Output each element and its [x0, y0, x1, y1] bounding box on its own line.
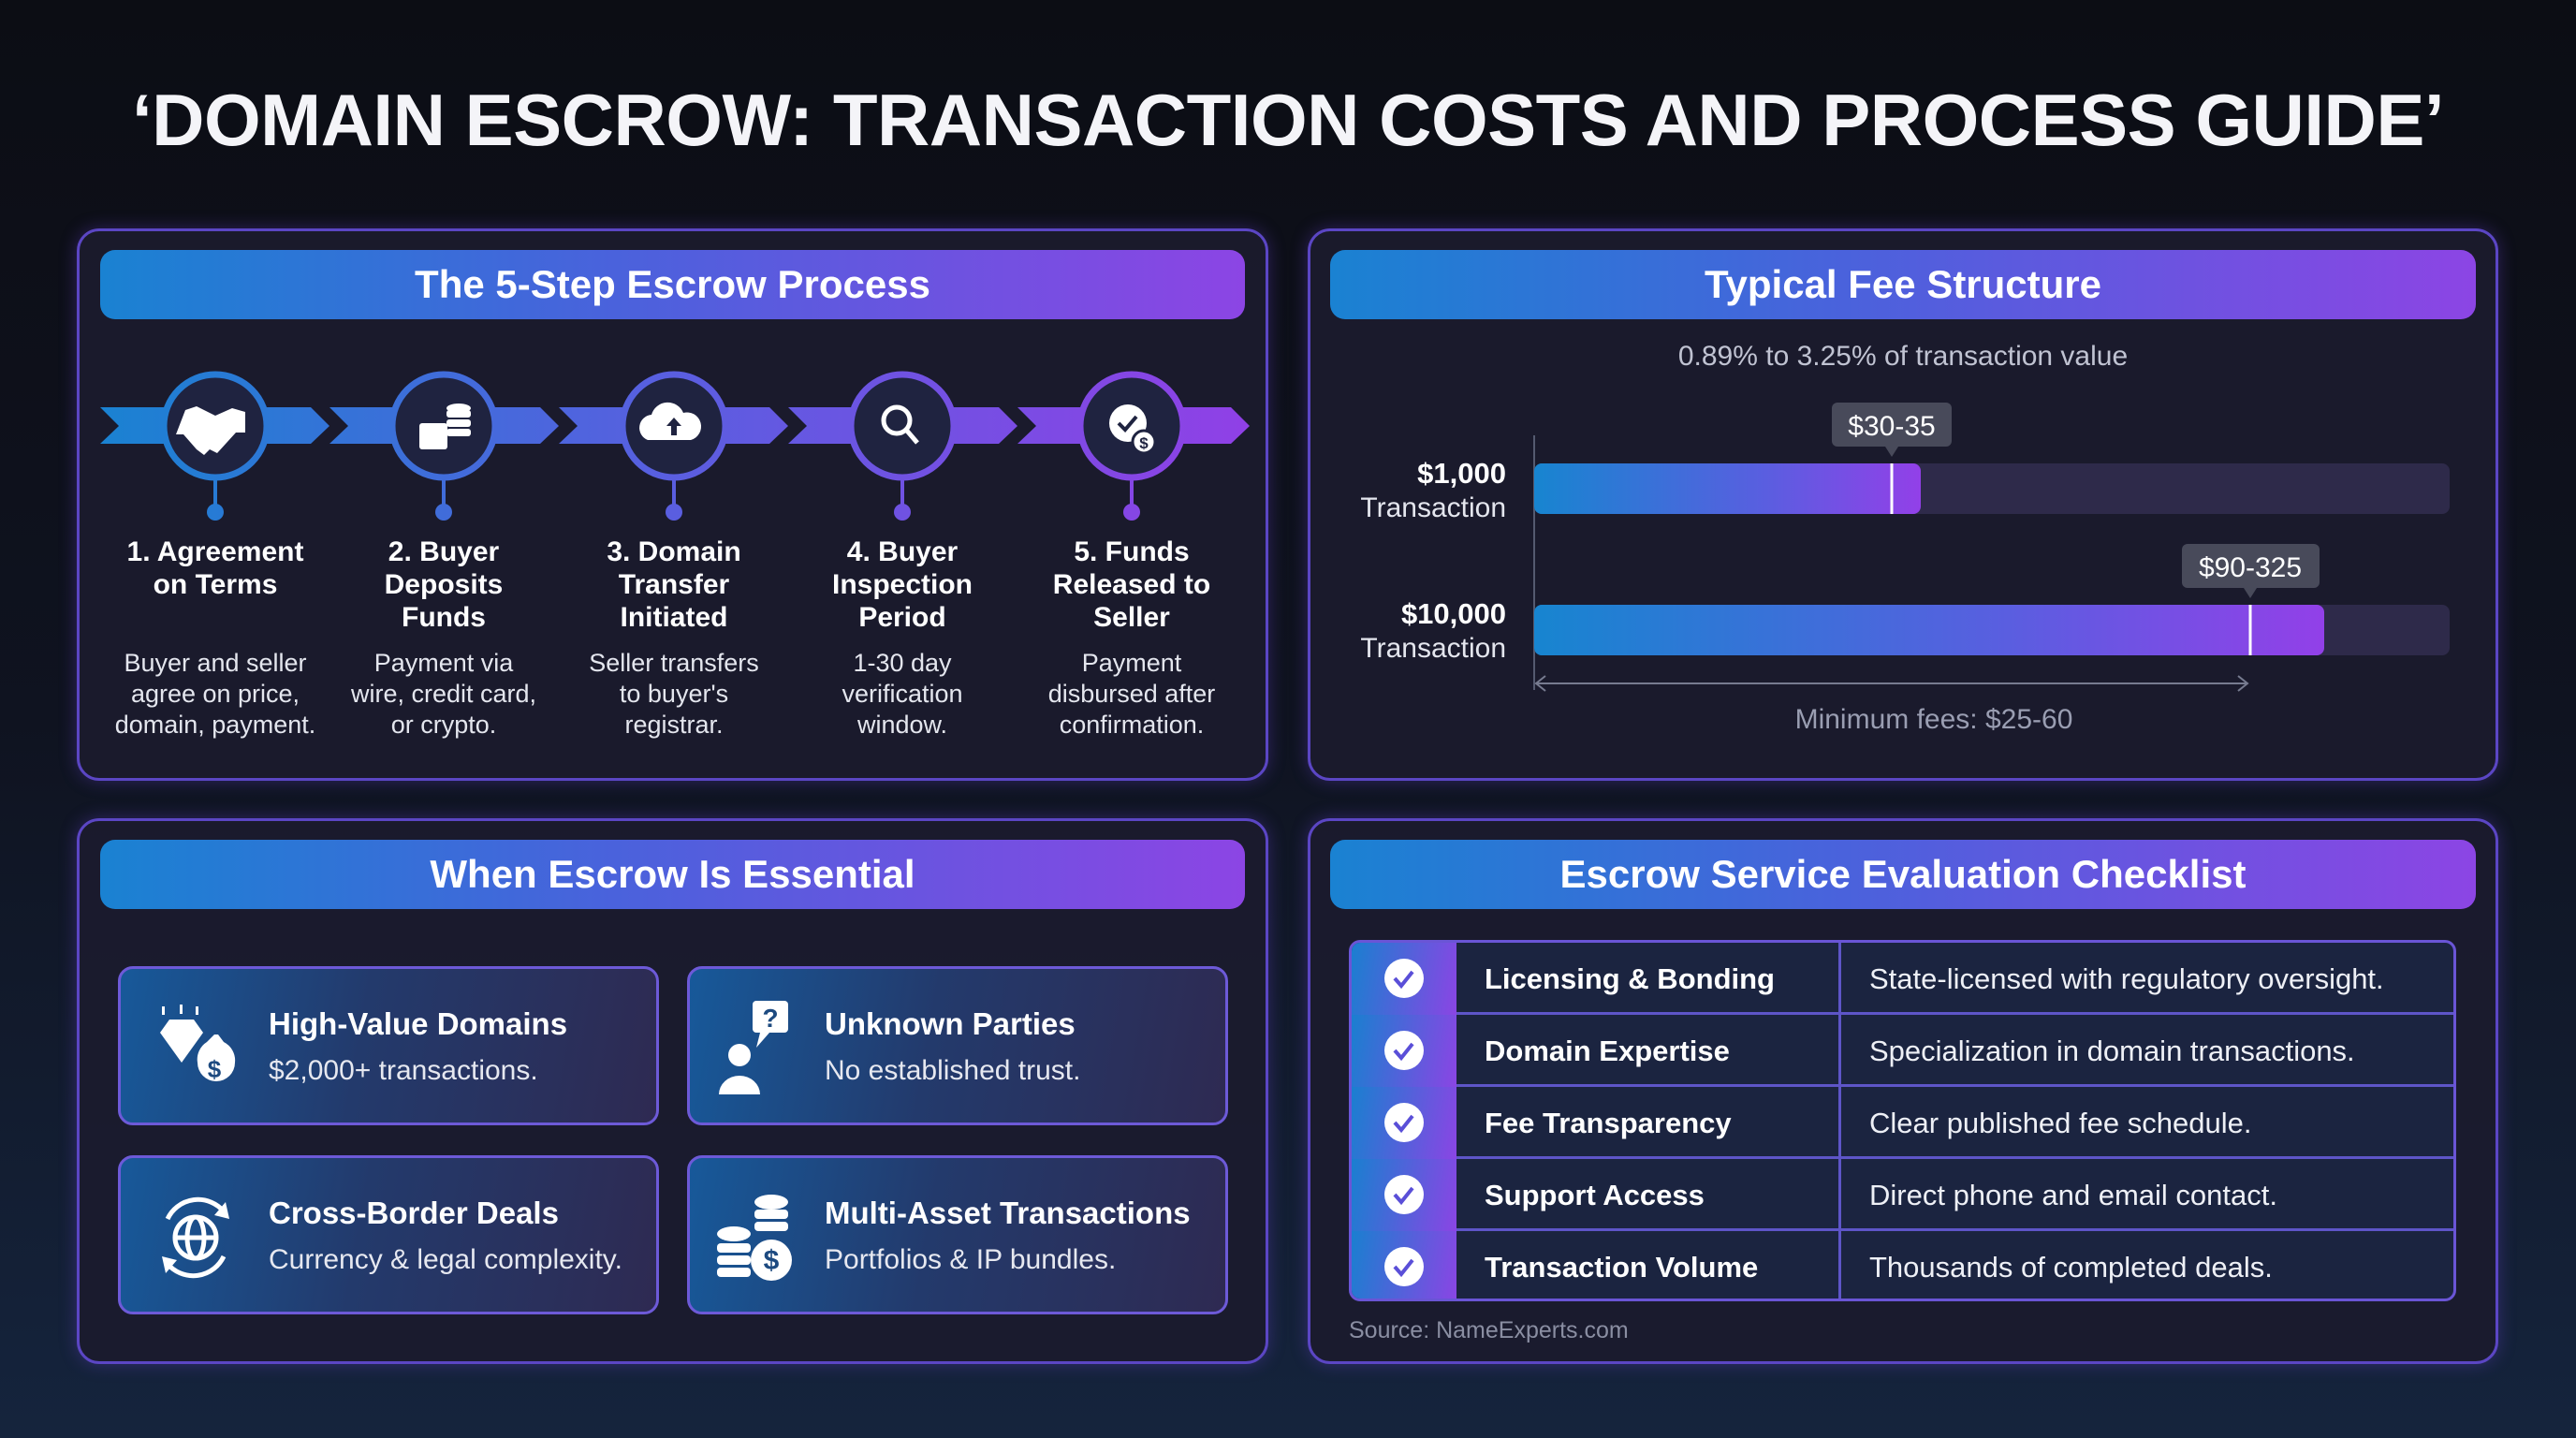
text: 1-30 day	[853, 649, 952, 677]
text: 1. Agreement	[127, 536, 303, 567]
icon: magnifier	[884, 407, 917, 443]
title: ‘DOMAIN ESCROW: TRANSACTION COSTS AND PROCESS GUIDE’	[132, 79, 2444, 161]
text: Released to	[1053, 569, 1210, 600]
panel: fee structure	[1308, 228, 2498, 781]
heading: evaluation checklist: Escrow Service Evaluation Checklist	[1559, 852, 2247, 896]
text: Deposits	[385, 569, 503, 600]
row: domain expertise	[1352, 1015, 2459, 1087]
heading: fee structure: Typical Fee Structure	[1705, 262, 2101, 306]
icon: cloud upload	[639, 403, 701, 440]
bar chart: fees: Minimum fees: $25-60	[1795, 704, 2072, 735]
panel: 5-step escrow process	[77, 228, 1268, 781]
row: transaction volume	[1352, 1231, 2273, 1299]
text: registrar.	[624, 711, 724, 739]
icon: check and dollar: $	[1139, 434, 1149, 452]
icon: coin stacks	[717, 1195, 792, 1281]
text: Seller transfers	[589, 649, 759, 677]
process timeline	[100, 371, 1250, 521]
row: support access: Direct phone and email contact.	[1869, 1179, 2277, 1211]
tooltip $90-325: $90-325	[2199, 552, 2302, 583]
row: fee transparency: Fee Transparency	[1485, 1107, 1732, 1139]
step 4	[832, 536, 973, 739]
text: domain, payment.	[115, 711, 315, 739]
heading: evaluation checklist	[1330, 840, 2476, 909]
text: Inspection	[832, 569, 973, 600]
text: verification	[842, 680, 963, 708]
row: support access	[1352, 1159, 2459, 1231]
icon: check and dollar	[1109, 404, 1155, 453]
card: cross-border deals: Cross-Border Deals	[269, 1196, 559, 1230]
text: on Terms	[154, 569, 277, 600]
text: 2. Buyer	[388, 536, 499, 567]
text: Payment	[1082, 649, 1181, 677]
bar chart: fees: Transaction	[1360, 633, 1506, 664]
text: confirmation.	[1060, 711, 1204, 739]
icon: handshake	[176, 406, 245, 455]
icon: person with question: ?	[762, 1004, 779, 1033]
card: multi-asset transactions: Portfolios & IP bundles.	[825, 1244, 1116, 1275]
text: agree on price,	[131, 680, 300, 708]
row: support access: Support Access	[1485, 1179, 1705, 1211]
text: Period	[858, 602, 946, 633]
icon: person with question	[719, 1001, 788, 1094]
heading: fee structure	[1330, 250, 2476, 319]
card: high-value domains	[118, 966, 659, 1125]
card: unknown parties: Unknown Parties	[825, 1006, 1076, 1041]
subtitle: fee range: 0.89% to 3.25% of transaction value	[1678, 341, 2128, 372]
step 1	[115, 536, 315, 739]
text: window.	[857, 711, 947, 739]
bar chart: fees: $1,000	[1417, 457, 1506, 490]
card: cross-border deals	[118, 1155, 659, 1314]
step 5	[1048, 536, 1215, 739]
text: wire, credit card,	[351, 680, 536, 708]
text: Transfer	[619, 569, 729, 600]
step 2	[351, 536, 536, 739]
row: licensing: Licensing & Bonding	[1485, 962, 1775, 995]
bar chart: fees: $10,000	[1401, 597, 1506, 630]
card: high-value domains: $2,000+ transactions.	[269, 1055, 538, 1086]
heading: when escrow is essential	[100, 840, 1245, 909]
text: or crypto.	[391, 711, 496, 739]
tooltip $90-325	[2182, 544, 2320, 598]
card: unknown parties: No established trust.	[825, 1055, 1080, 1086]
text: Funds	[402, 602, 486, 633]
checklist table	[1349, 940, 2456, 1301]
text: 5. Funds	[1074, 536, 1190, 567]
arrow: minimum fees span	[1536, 676, 2247, 691]
icon: wallet and coins	[419, 404, 471, 449]
row: licensing: State-licensed with regulatory oversight.	[1869, 962, 2384, 995]
panel: evaluation checklist	[1308, 818, 2498, 1364]
text: 4. Buyer	[847, 536, 958, 567]
text: Payment via	[374, 649, 513, 677]
card: high-value domains: High-Value Domains	[269, 1006, 567, 1041]
bar chart: fees: Transaction	[1360, 492, 1506, 523]
source note: Source: NameExperts.com	[1349, 1317, 1629, 1343]
text: Seller	[1093, 602, 1170, 633]
row: domain expertise: Specialization in domain transactions.	[1869, 1034, 2355, 1067]
row: domain expertise: Domain Expertise	[1485, 1034, 1730, 1067]
text: Initiated	[620, 602, 728, 633]
card: unknown parties	[687, 966, 1228, 1125]
icon: diamond and money bag: $	[208, 1055, 222, 1083]
heading: 5-step process	[100, 250, 1245, 319]
heading: when escrow is essential: When Escrow Is Essential	[430, 852, 915, 896]
text: to buyer's	[620, 680, 728, 708]
icon: diamond and money bag	[160, 1005, 236, 1083]
card: cross-border deals: Currency & legal complexity.	[269, 1244, 622, 1275]
icon: coin stacks: $	[764, 1245, 780, 1276]
bar chart: fees	[1360, 403, 2450, 735]
text: disbursed after	[1048, 680, 1215, 708]
card: multi-asset transactions: Multi-Asset Transactions	[825, 1196, 1191, 1230]
text: Buyer and seller	[124, 649, 307, 677]
text: 3. Domain	[607, 536, 741, 567]
heading: 5-step process: The 5-Step Escrow Process	[415, 262, 930, 306]
tooltip $30-35: $30-35	[1848, 411, 1936, 442]
row: licensing	[1352, 943, 2459, 1015]
row: fee transparency	[1352, 1087, 2459, 1159]
row: fee transparency: Clear published fee schedule.	[1869, 1107, 2251, 1139]
panel: when escrow is essential	[77, 818, 1268, 1364]
row: transaction volume: Transaction Volume	[1485, 1251, 1758, 1284]
card: multi-asset transactions	[687, 1155, 1228, 1314]
row: transaction volume: Thousands of completed deals.	[1869, 1251, 2273, 1284]
icon: globe with arrows	[162, 1196, 229, 1279]
step 3	[589, 536, 759, 739]
tooltip $30-35	[1832, 403, 1952, 457]
